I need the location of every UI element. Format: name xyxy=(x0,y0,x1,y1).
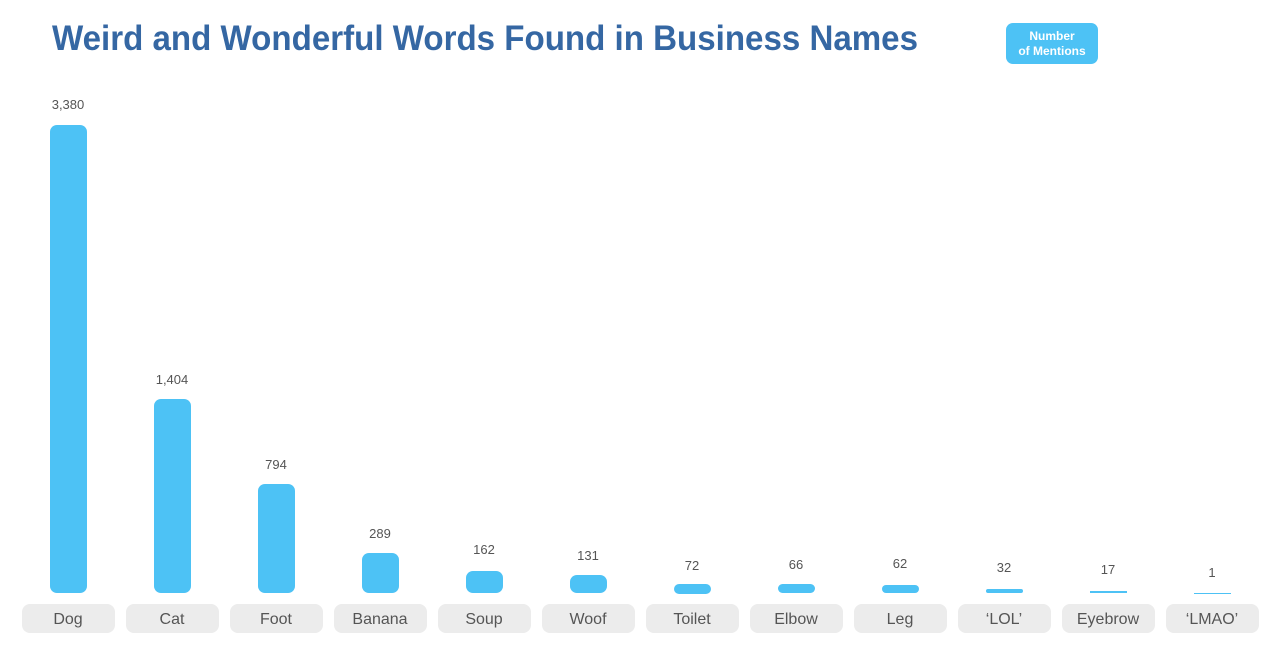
bar: Dog xyxy=(22,97,115,633)
bar: Soup: 162 xyxy=(473,542,495,557)
bar: Banana: 289 xyxy=(369,526,391,541)
bar: Eyebrow: Eyebrow xyxy=(1077,611,1140,628)
bar: Toilet: Toilet xyxy=(673,611,711,628)
legend xyxy=(1006,23,1098,64)
bar: Dog: Dog xyxy=(53,611,83,628)
bar: LMAO: ‘LMAO’ xyxy=(1186,611,1238,628)
bar: Dog: 3,380 xyxy=(52,97,84,112)
bar: Cat: Cat xyxy=(160,611,185,628)
bar: LMAO: 1 xyxy=(1208,565,1216,580)
bar: Elbow: Elbow xyxy=(774,611,818,628)
bar: Cat: 1,404 xyxy=(156,372,188,387)
bar: LOL: 32 xyxy=(997,560,1011,575)
bar: Soup: Soup xyxy=(465,611,503,628)
bar: Toilet xyxy=(646,558,739,633)
legend: Number xyxy=(1029,29,1075,43)
bar: LMAO xyxy=(1166,565,1259,633)
bar: Foot: Foot xyxy=(260,611,293,628)
bar: Leg xyxy=(854,556,947,633)
bar: Woof: 131 xyxy=(577,548,599,563)
bar: Leg: Leg xyxy=(887,611,913,628)
bar: LOL xyxy=(958,560,1051,633)
legend: of Mentions xyxy=(1018,44,1086,58)
bar: Woof: Woof xyxy=(569,611,607,628)
bar: Elbow xyxy=(750,557,843,633)
bar: Woof xyxy=(542,548,635,633)
bar: LOL: ‘LOL’ xyxy=(986,611,1022,628)
bar: Banana: Banana xyxy=(352,611,408,628)
bar: Leg: 62 xyxy=(893,556,907,571)
bar: Toilet: 72 xyxy=(685,558,699,573)
bar: Cat xyxy=(126,372,219,633)
title: Weird and Wonderful Words Found in Business Names xyxy=(52,19,918,58)
bar: Eyebrow: 17 xyxy=(1101,562,1115,577)
bar: Elbow: 66 xyxy=(789,557,803,572)
bar: Foot: 794 xyxy=(265,457,287,472)
bar: Soup xyxy=(438,542,531,633)
bar: Banana xyxy=(334,526,427,633)
bar: Foot xyxy=(230,457,323,633)
bar: Eyebrow xyxy=(1062,562,1155,633)
bar chart xyxy=(22,97,1259,633)
